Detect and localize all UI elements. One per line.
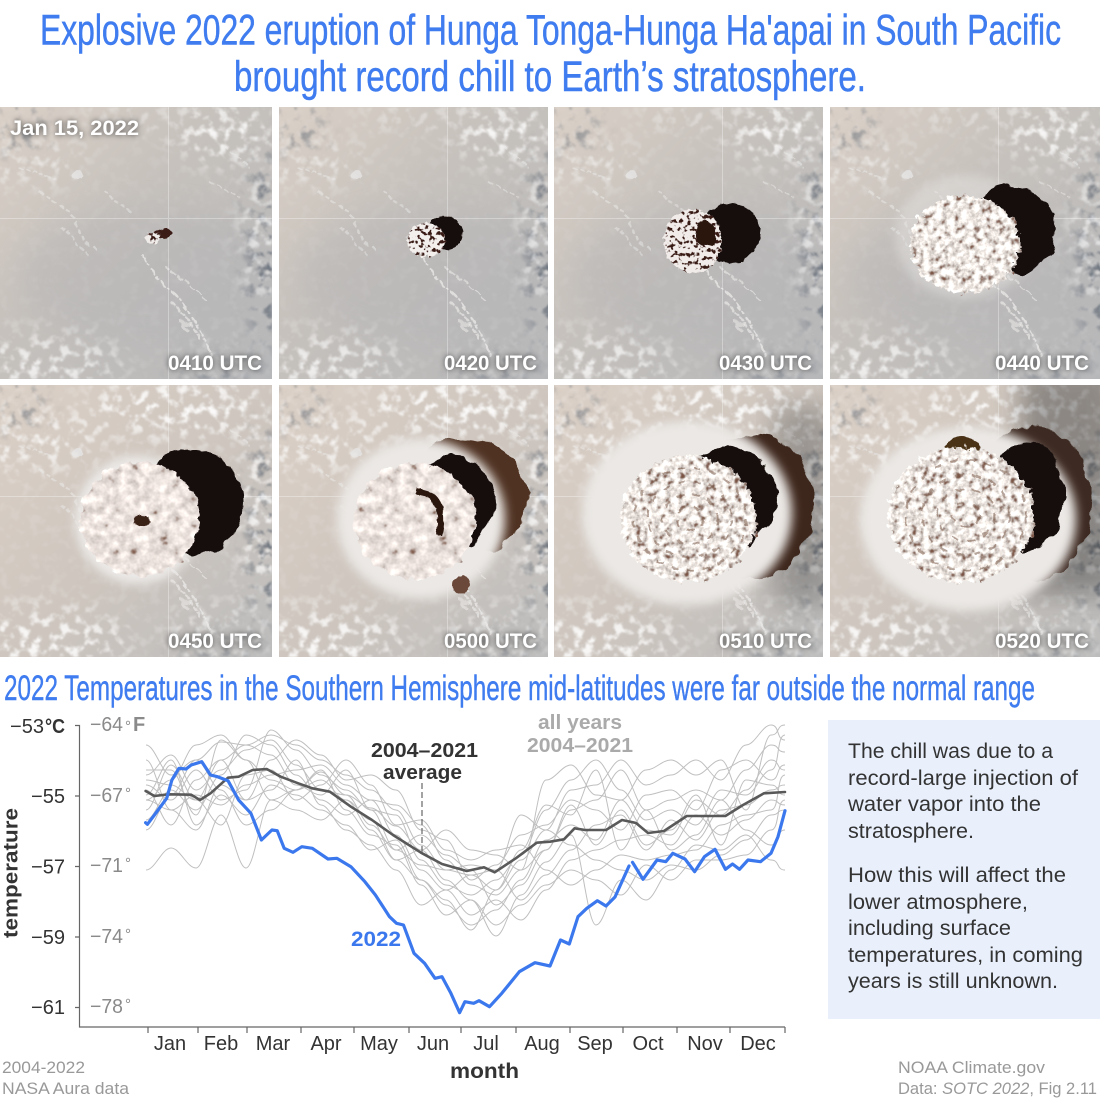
callout text: unknown effects: lower atmosphere, <box>848 890 1028 914</box>
fahrenheit axis labels: ° <box>125 718 131 735</box>
time label: 0410 UTC <box>168 352 262 375</box>
eruption plume 0430 <box>664 203 760 273</box>
panel: satellite image 0450 UTC <box>0 385 272 657</box>
fahrenheit axis labels: ° <box>125 996 131 1013</box>
source note right <box>898 1058 1097 1098</box>
all years label <box>527 712 633 757</box>
callout text: unknown effects: years is still unknown. <box>848 969 1058 993</box>
month labels: Apr <box>310 1033 342 1055</box>
eruption plume 0440 <box>895 175 1056 299</box>
title <box>40 6 1061 101</box>
month labels <box>154 1033 776 1055</box>
source note right: Data: SOTC 2022, Fig 2.11 <box>898 1079 1097 1098</box>
time label: 0440 UTC <box>995 352 1089 375</box>
panel: satellite image 0430 UTC <box>554 107 823 379</box>
2022 line <box>146 762 785 1013</box>
celsius axis labels: −57 <box>31 856 65 878</box>
celsius axis labels: −59 <box>31 927 65 949</box>
month labels: Mar <box>256 1033 291 1055</box>
month labels: Jul <box>473 1033 499 1055</box>
all years label: 2004–2021 <box>527 735 633 757</box>
celsius axis labels: −61 <box>31 997 65 1019</box>
fahrenheit axis labels: ° <box>125 855 131 872</box>
callout text: cause: The chill was due to a <box>848 739 1053 763</box>
x axis title: month <box>450 1060 519 1083</box>
eruption plume 0410 <box>146 229 172 244</box>
panel: satellite image 0510 UTC <box>554 385 823 657</box>
average label: 2004–2021 <box>371 740 478 762</box>
axes <box>75 726 785 1033</box>
callout text: unknown effects: including surface <box>848 916 1011 940</box>
panel: satellite image 0520 UTC <box>830 385 1100 657</box>
eruption plume 0520 <box>860 365 1100 611</box>
2004-2021 average line <box>146 769 785 872</box>
celsius axis labels <box>10 716 65 1019</box>
fahrenheit axis labels: −64 <box>90 714 123 736</box>
eruption plume 0500 <box>337 438 527 599</box>
time label: 0500 UTC <box>444 630 537 653</box>
callout text: unknown effects: How this will affect the <box>848 863 1066 887</box>
callout panel <box>828 720 1100 1019</box>
line chart <box>0 712 785 1083</box>
month labels: Feb <box>204 1033 238 1055</box>
source note left <box>2 1058 130 1098</box>
title: brought record chill to Earth’s stratosphere. <box>234 53 866 101</box>
callout text: cause: water vapor into the <box>847 792 1041 816</box>
panel: satellite image 0500 UTC <box>279 385 548 657</box>
callout text: cause: stratosphere. <box>848 819 974 843</box>
callout text: cause: record-large injection of <box>848 766 1078 790</box>
time label: 0430 UTC <box>719 352 812 375</box>
callout text: unknown effects <box>848 863 1083 993</box>
fahrenheit axis labels: F <box>133 714 145 736</box>
eruption plume 0420 <box>407 216 463 257</box>
average label <box>371 740 478 784</box>
all years label: all years <box>538 712 622 734</box>
month labels: May <box>360 1033 398 1055</box>
time label: 0450 UTC <box>168 630 262 653</box>
fahrenheit axis labels: −67 <box>90 785 123 807</box>
celsius axis labels: −53 <box>10 716 44 738</box>
month labels: Oct <box>632 1033 664 1055</box>
eruption plume 0450 <box>75 450 244 584</box>
fahrenheit axis labels: ° <box>125 785 131 802</box>
month labels: Dec <box>740 1033 776 1055</box>
time label: 0510 UTC <box>719 630 812 653</box>
average label: average <box>383 762 462 784</box>
panel: satellite image 0410 UTC <box>0 107 272 379</box>
celsius axis labels: °C <box>45 716 65 738</box>
fahrenheit axis labels: ° <box>125 926 131 943</box>
callout text: cause <box>847 739 1078 843</box>
callout text: unknown effects: temperatures, in coming <box>848 943 1083 967</box>
fahrenheit axis labels: −74 <box>90 926 123 948</box>
celsius axis labels: −55 <box>31 786 65 808</box>
source note left: NASA Aura data <box>2 1079 130 1098</box>
time label: 0420 UTC <box>444 352 537 375</box>
fahrenheit axis labels <box>90 714 145 1018</box>
source note left: 2004-2022 <box>2 1058 85 1077</box>
panel: satellite image 0440 UTC <box>830 107 1100 379</box>
eruption plume 0510 <box>582 405 834 605</box>
month labels: Sep <box>577 1033 613 1055</box>
fahrenheit axis labels: −78 <box>90 996 123 1018</box>
all years thin lines <box>146 725 785 936</box>
time label: 0520 UTC <box>995 630 1089 653</box>
month labels: Jan <box>154 1033 186 1055</box>
fahrenheit axis labels: −71 <box>90 855 123 877</box>
date label: Jan 15, 2022 <box>10 117 139 140</box>
month labels: Nov <box>687 1033 723 1055</box>
average leader line <box>421 783 423 852</box>
y axis title: temperature <box>0 808 22 938</box>
2022 label: 2022 <box>351 928 401 951</box>
month labels: Aug <box>524 1033 560 1055</box>
panel: satellite image 0420 UTC <box>279 107 548 379</box>
month labels: Jun <box>417 1033 449 1055</box>
source note right: NOAA Climate.gov <box>898 1058 1046 1077</box>
